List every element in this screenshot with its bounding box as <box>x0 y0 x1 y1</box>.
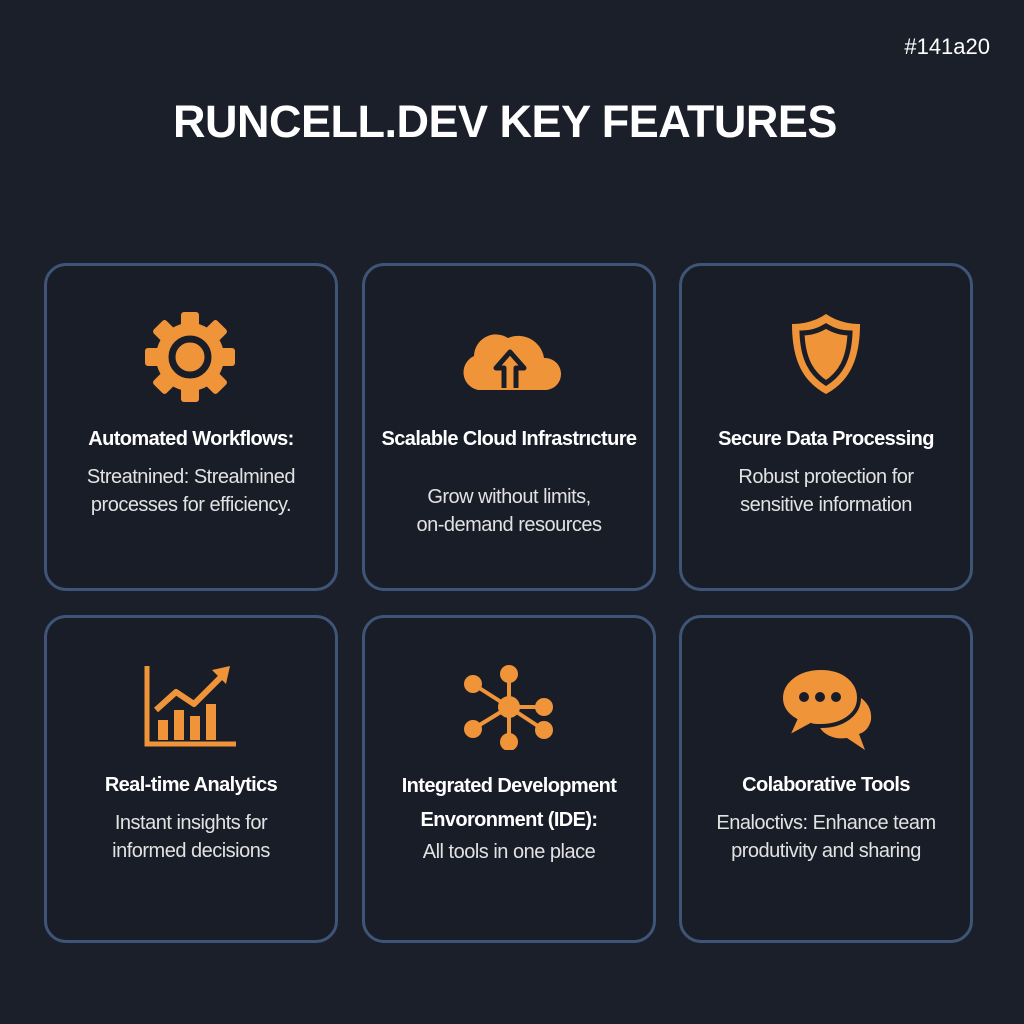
heading: Envoronment (IDE): <box>420 809 597 831</box>
heading: Scalable Cloud Infrastrıcture <box>382 428 636 450</box>
icon: cloud upload <box>464 334 562 390</box>
icon: network <box>464 665 553 750</box>
body text: Grow without limits, <box>427 486 591 508</box>
hex code label: #141a20 <box>904 34 990 59</box>
body text: Enaloctivs: Enhance team <box>716 812 936 834</box>
body text: sensitive information <box>740 494 912 516</box>
panel: secure data <box>679 263 973 591</box>
heading: Integrated Development <box>402 775 616 797</box>
title: RUNCELL.DEV KEY FEATURES <box>173 96 837 147</box>
body text: informed decisions <box>112 840 270 862</box>
heading: Colaborative Tools <box>742 774 910 796</box>
panel: IDE <box>362 615 656 943</box>
heading: Real-time Analytics <box>105 774 277 796</box>
body text <box>738 466 914 516</box>
icon: shield <box>792 314 860 394</box>
body text <box>416 486 602 536</box>
heading <box>402 775 617 831</box>
icon: gear <box>145 312 235 402</box>
panel: automated workflows <box>44 263 338 591</box>
body text <box>716 812 936 862</box>
body text: on-demand resources <box>416 514 602 536</box>
panel: collaborative tools <box>679 615 973 943</box>
body text: processes for efficiency. <box>91 494 291 516</box>
body text: Robust protection for <box>738 466 914 488</box>
panel: scalable cloud <box>362 263 656 591</box>
body text: Instant insights for <box>115 812 267 834</box>
body text: produtivity and sharing <box>731 840 921 862</box>
heading: Automated Workflows: <box>88 428 294 450</box>
body text: Streatnined: Strealmined <box>87 466 295 488</box>
icon: bar chart <box>144 666 236 746</box>
panel: real-time analytics <box>44 615 338 943</box>
body text <box>87 466 295 516</box>
icon: chat bubbles <box>783 670 872 750</box>
body text <box>112 812 270 862</box>
heading: Secure Data Processing <box>718 428 934 450</box>
body text: All tools in one place <box>423 841 595 863</box>
